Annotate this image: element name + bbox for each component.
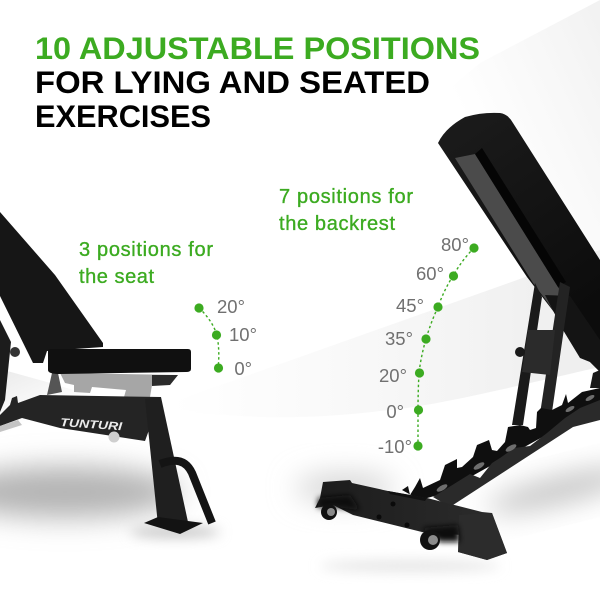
under rail <box>455 154 600 372</box>
backrest angle scale <box>378 234 479 457</box>
title <box>35 30 480 134</box>
seat angle scale: 10° <box>229 324 257 345</box>
backrest angle scale: 80° <box>441 234 469 255</box>
front upright <box>538 282 570 432</box>
plate <box>522 330 555 375</box>
backrest angle scale: 60° <box>416 263 444 284</box>
foot bar <box>315 480 507 560</box>
backrest angle scale: 45° <box>396 295 424 316</box>
backrest bench illustration <box>315 113 600 560</box>
seat angle scale: 20° <box>217 296 245 317</box>
title: FOR LYING AND SEATED <box>35 64 430 100</box>
backrest angle scale: 35° <box>385 328 413 349</box>
seat label <box>79 239 213 288</box>
knob <box>515 347 525 357</box>
backrest angle scale: -10° <box>378 436 412 457</box>
under beam highlight <box>0 420 22 432</box>
backrest label: the backrest <box>279 213 395 235</box>
seat bracket <box>60 373 178 398</box>
backrest angle scale: 20° <box>379 365 407 386</box>
seat angle scale: 0° <box>234 358 252 379</box>
rear bracket <box>0 320 11 412</box>
title: 10 ADJUSTABLE POSITIONS <box>35 30 480 66</box>
top plate <box>388 491 427 501</box>
seat bench illustration <box>0 212 212 534</box>
backrest angle scale: 0° <box>386 401 404 422</box>
curved bracket <box>545 295 600 372</box>
logo: TUNTURI <box>60 417 123 433</box>
wheels <box>321 504 337 520</box>
seat label: 3 positions for <box>79 239 213 261</box>
seat pad <box>48 349 191 374</box>
backrest <box>0 212 103 363</box>
rear upright <box>512 283 542 425</box>
seat angle scale <box>194 296 257 379</box>
frame beam <box>433 400 600 505</box>
hook handle <box>160 461 212 523</box>
leg <box>145 397 188 530</box>
bolt holes <box>390 502 396 506</box>
knob <box>10 347 20 357</box>
end block <box>458 513 507 560</box>
seat label: the seat <box>79 266 154 288</box>
toothed rack <box>402 388 600 500</box>
foot plate <box>144 517 203 534</box>
floor shadows <box>0 460 600 572</box>
title: EXERCISES <box>35 98 211 134</box>
lower bracket <box>590 370 600 388</box>
backrest label <box>279 186 413 235</box>
scallop highlights <box>436 394 595 493</box>
backrest label: 7 positions for <box>279 186 413 208</box>
pad <box>438 113 600 372</box>
wheel brackets <box>318 495 460 542</box>
frame beam <box>0 395 161 441</box>
